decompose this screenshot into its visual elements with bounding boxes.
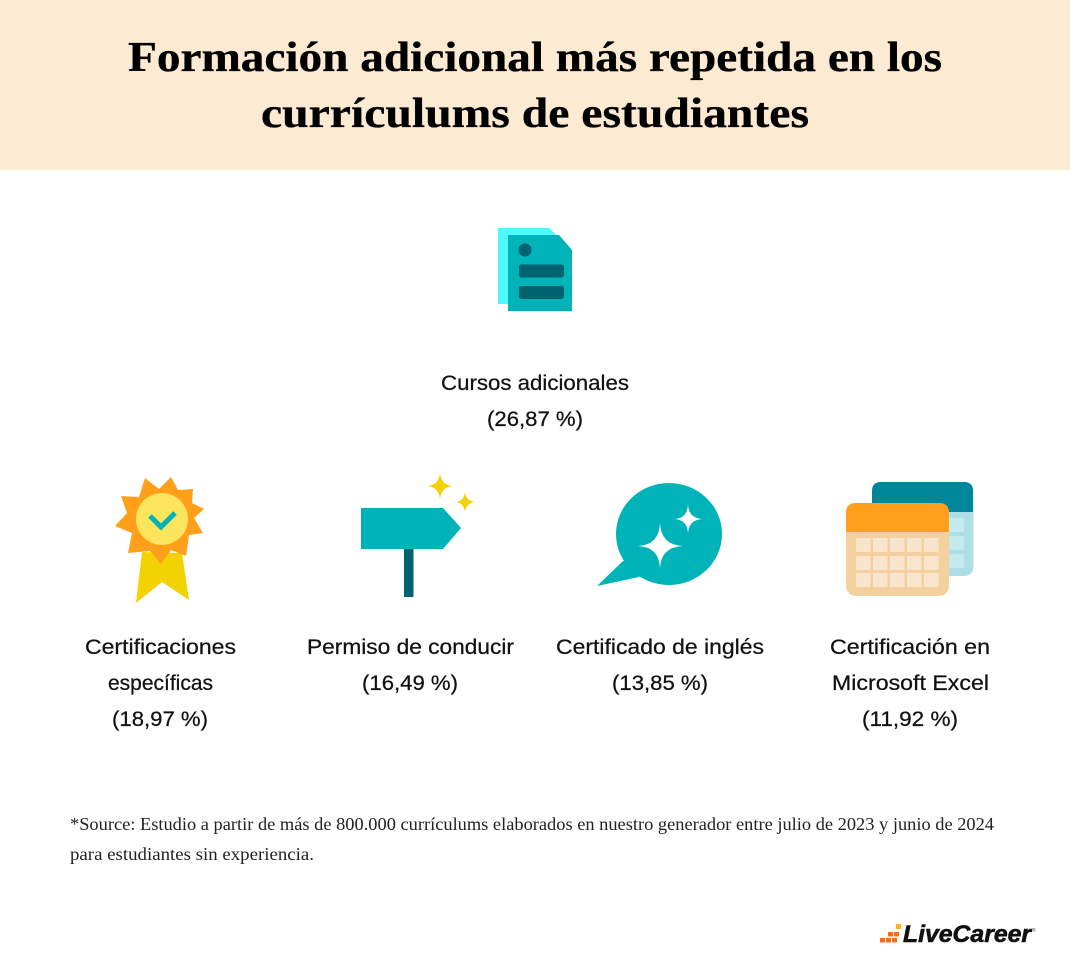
label: permiso de conducir: (16,49 %) <box>362 672 458 695</box>
label: certificaciones específicas <box>85 636 236 731</box>
source note: para estudiantes sin experiencia. <box>70 844 314 864</box>
logo: LiveCareer: ® <box>1032 927 1036 934</box>
icon: speech bubble <box>597 483 722 586</box>
label: certificaciones específicas: (18,97 %) <box>112 708 208 731</box>
title: currículums de estudiantes <box>261 91 809 137</box>
label: permiso de conducir <box>307 636 514 695</box>
title <box>128 35 942 137</box>
logo: LiveCareer: LiveCareer <box>903 921 1033 948</box>
icon: calendars <box>846 482 974 596</box>
label: certificación en microsoft excel: Microsoft Excel <box>832 672 989 695</box>
label: cursos adicionales: Cursos adicionales <box>441 372 629 395</box>
label: certificado de inglés: Certificado de inglés <box>556 636 764 659</box>
source note <box>70 814 994 864</box>
label: certificación en microsoft excel <box>830 636 990 731</box>
label: permiso de conducir: Permiso de conducir <box>307 636 514 659</box>
label: certificación en microsoft excel: Certificación en <box>830 636 990 659</box>
label: certificaciones específicas: Certificaciones <box>85 636 236 659</box>
source note: *Source: Estudio a partir de más de 800.000 currículums elaborados en nuestro generador entre julio de 2023 y junio de 2024 <box>70 814 994 834</box>
label: certificaciones específicas: específicas <box>108 672 213 695</box>
header band <box>0 0 1070 170</box>
label: cursos adicionales: (26,87 %) <box>487 408 583 431</box>
label: cursos adicionales <box>441 372 629 431</box>
label: certificado de inglés <box>556 636 764 695</box>
title: Formación adicional más repetida en los <box>128 35 942 81</box>
label: certificación en microsoft excel: (11,92 %) <box>862 708 958 731</box>
icon: signpost <box>361 473 475 597</box>
label: certificado de inglés: (13,85 %) <box>612 672 708 695</box>
icon: medal <box>115 477 204 603</box>
icon: documents <box>498 228 572 311</box>
